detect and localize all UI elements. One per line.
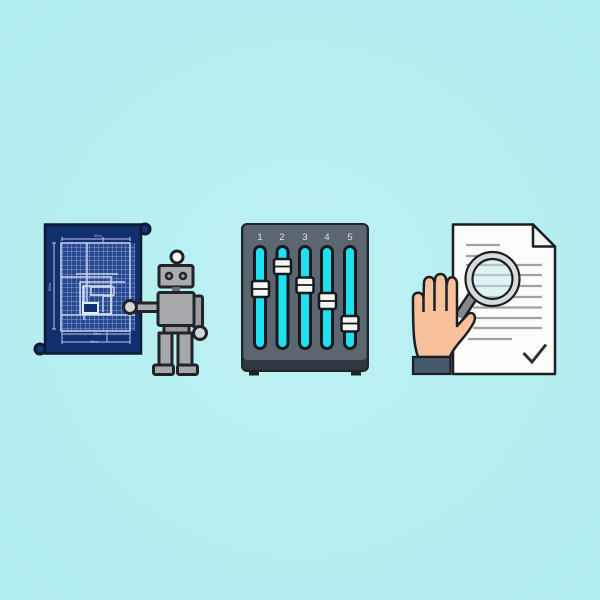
blueprint dimension labels: 60m (47, 283, 52, 291)
blueprint dimension labels: 15m (93, 331, 101, 336)
panel base (249, 371, 361, 376)
robot head (159, 266, 193, 287)
slider numbers: 4 (324, 232, 330, 243)
robot torso (158, 292, 194, 326)
slider numbers (257, 232, 353, 243)
slider numbers: 1 (257, 232, 263, 243)
slider knobs (252, 259, 358, 332)
check mark (524, 344, 546, 362)
robot legs (159, 333, 192, 365)
robot hands (124, 300, 206, 340)
robot hips (164, 325, 189, 333)
blueprint dimension lines (52, 237, 130, 344)
blueprint dimension labels: 20m (94, 233, 102, 238)
slider numbers: 5 (347, 232, 353, 243)
shirt cuff (413, 357, 450, 374)
slider numbers: 2 (279, 232, 285, 243)
document text lines (466, 245, 542, 339)
magnifying glass (466, 252, 520, 306)
finger separators (424, 282, 446, 312)
robot eyes (166, 273, 186, 279)
icon: robot (124, 251, 206, 374)
robot antenna (171, 251, 183, 263)
icon: document under review (413, 224, 555, 374)
blueprint grid (60, 243, 135, 331)
blueprint dimension labels (47, 233, 102, 344)
slider tracks (254, 246, 356, 348)
robot feet (154, 365, 198, 374)
icon: blueprint scroll (35, 224, 150, 354)
blueprint floor plan lines (61, 243, 135, 331)
document page (453, 224, 555, 374)
robot right arm (193, 296, 202, 327)
panel face (244, 225, 366, 360)
robot pointing arm (136, 303, 159, 312)
slider numbers: 3 (302, 232, 308, 243)
magnifying glass handle (459, 296, 473, 317)
blueprint dimension labels: 30m (90, 339, 98, 344)
folded corner (533, 224, 555, 246)
hand (413, 274, 475, 357)
knob centre lines (252, 266, 358, 324)
icon: slider control panel (242, 224, 368, 376)
